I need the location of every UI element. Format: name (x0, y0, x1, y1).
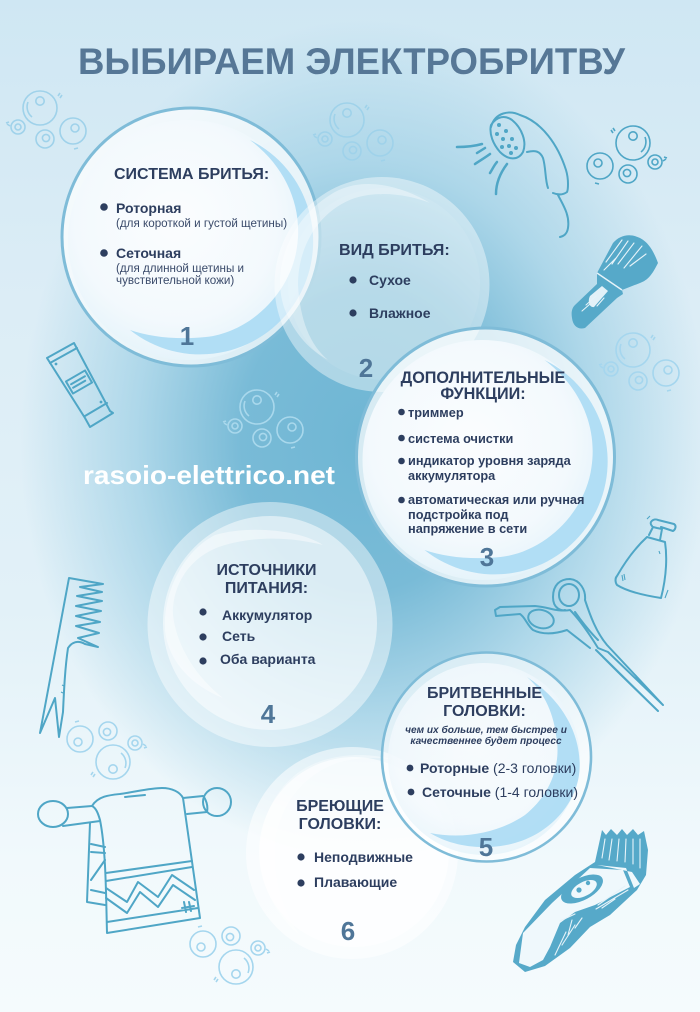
heading: power source: ИСТОЧНИКИ (216, 562, 317, 579)
panel: bubble 3 (356, 327, 616, 587)
heading: razor heads: БРИТВЕННЫЕ (427, 685, 542, 702)
number 2: 2 (359, 353, 373, 383)
panel: bubble 6 (246, 747, 458, 959)
soap bubbles right (599, 333, 679, 391)
panel: bubble 1 (61, 107, 321, 367)
item: foil heads: Сеточные (1-4 головки) (422, 784, 578, 800)
number 3: 3 (480, 542, 494, 572)
item: foil: Сеточная (116, 245, 181, 261)
panel: bubble 5 (381, 652, 592, 862)
item: mains: Сеть (222, 628, 256, 644)
heading line 2: ГОЛОВКИ: (299, 816, 381, 833)
number 1: 1 (180, 321, 194, 351)
icon: comb (40, 578, 103, 737)
icon: scissors (495, 579, 663, 711)
soap bubbles centre (223, 390, 303, 448)
soap bubbles top right (587, 126, 667, 184)
heading line 2: ГОЛОВКИ: (443, 703, 526, 720)
soap bubbles near comb (67, 721, 147, 779)
item: rotary: Роторная (116, 200, 181, 216)
item: floating: Плавающие (314, 874, 397, 890)
icon: shower head (457, 113, 568, 237)
heading: shaving system: СИСТЕМА БРИТЬЯ: (114, 166, 269, 183)
item: cleaning: система очистки (408, 431, 513, 446)
icon: cream tube (47, 343, 113, 427)
note: rotary: (для короткой и густой щетины) (116, 217, 287, 230)
soap bubbles top centre (313, 103, 393, 161)
item: both: Оба варианта (220, 651, 316, 667)
icon: towel on rail (38, 788, 231, 933)
number 5: 5 (479, 832, 493, 862)
note: foil: (для длинной щетины и (116, 262, 244, 275)
item: fixed: Неподвижные (314, 849, 413, 865)
watermark: rasoio-elettrico.net (83, 460, 335, 490)
item: charge indicator line 2: аккумулятора (408, 468, 496, 483)
icon: electric hair clipper (513, 829, 648, 972)
item: battery: Аккумулятор (222, 607, 312, 623)
item: trimmer: триммер (408, 405, 464, 420)
heading: shaving type: ВИД БРИТЬЯ: (339, 241, 450, 259)
heading: extra functions: ДОПОЛНИТЕЛЬНЫЕ (401, 369, 566, 387)
soap bubbles top left (6, 91, 86, 149)
item: wet: Влажное (369, 305, 431, 321)
number 6: 6 (341, 916, 355, 946)
item: dry: Сухое (369, 272, 411, 288)
icon: shaving brush (572, 235, 658, 329)
item: rotary heads: Роторные (2-3 головки) (420, 760, 576, 776)
soap bubbles bottom (190, 926, 270, 984)
item: voltage: автоматическая или ручная (408, 492, 584, 507)
item: voltage line 2: подстройка под (408, 507, 508, 522)
heading line 2: ФУНКЦИИ: (440, 385, 526, 403)
heading line 2: ПИТАНИЯ: (225, 580, 308, 597)
note line 2: качественнее будет процесс (410, 735, 562, 747)
icon: soap dispenser (616, 516, 676, 598)
panel: bubble 4 (148, 502, 392, 747)
item: charge indicator: индикатор уровня заряда (408, 453, 572, 468)
note: foil line 2: чувствительной кожи) (116, 274, 234, 287)
note: чем их больше, тем быстрее и (405, 724, 567, 736)
panel: bubble 2 (274, 177, 490, 392)
heading: shaving heads: БРЕЮЩИЕ (296, 798, 384, 815)
title: ВЫБИРАЕМ ЭЛЕКТРОБРИТВУ (78, 41, 626, 82)
number 4: 4 (261, 699, 276, 729)
item: voltage line 3: напряжение в сети (408, 521, 527, 536)
